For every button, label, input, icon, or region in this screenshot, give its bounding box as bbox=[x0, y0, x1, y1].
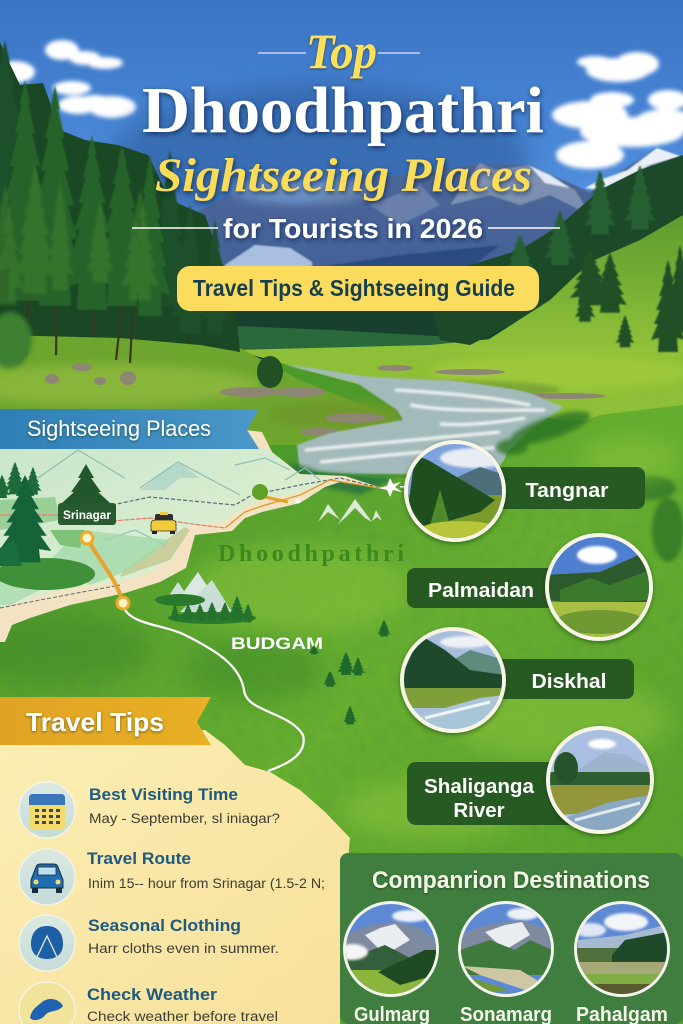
banner: Sightseeing Places bbox=[0, 409, 259, 449]
destination: Sonamarg bbox=[458, 901, 555, 1024]
right side shrubs bbox=[496, 405, 683, 562]
map place label: Budgam: BUDGAM bbox=[231, 634, 323, 653]
banner: Travel Tips: Travel Tips bbox=[26, 707, 164, 737]
place: Shaliganga River bbox=[407, 726, 655, 838]
place: Shaliganga River: River bbox=[453, 799, 505, 822]
place: Palmaidan: Palmaidan bbox=[428, 579, 534, 602]
map panel: illustrated Srinagar region bbox=[0, 430, 382, 642]
map route: orange road with stops bbox=[81, 532, 129, 609]
tip: Best Visiting Time: May - September, sl iniagar? bbox=[89, 811, 280, 826]
white mountain outline icon bbox=[318, 499, 382, 524]
destination: Gulmarg bbox=[336, 901, 440, 1024]
tip: Check Weather bbox=[19, 982, 278, 1024]
map route: white road to Budgam bbox=[125, 610, 304, 771]
subtitle pill: Travel Tips & Sightseeing Guide bbox=[193, 275, 515, 301]
place: Diskhal bbox=[400, 627, 634, 735]
sky background bbox=[0, 0, 683, 320]
map place label: Dhoodhpathri: Dhoodhpathri bbox=[218, 541, 404, 567]
distant mountains bbox=[170, 148, 683, 320]
grass shading bbox=[0, 438, 680, 840]
panel: travel tips parchment bbox=[0, 697, 350, 1024]
map icon: Srinagar tree and label bbox=[58, 464, 116, 525]
tip: Travel Route bbox=[19, 849, 325, 905]
left meadow ground bbox=[0, 325, 410, 445]
tip: Best Visiting Time bbox=[19, 782, 280, 838]
place: Diskhal: Diskhal bbox=[532, 670, 606, 693]
tip: Travel Route: Inim 15-- hour from Srinagar (1.5-2 N; bbox=[88, 876, 325, 891]
tip: Seasonal Clothing bbox=[19, 915, 279, 971]
darker sky behind title bbox=[110, 85, 530, 235]
left pine forest bbox=[0, 40, 283, 388]
place: Tangnar: Tangnar bbox=[526, 479, 609, 502]
map marker: green pin and orange link bbox=[252, 484, 300, 504]
river bbox=[285, 365, 563, 474]
banner: Travel Tips bbox=[0, 697, 211, 745]
tip: Check Weather: Check weather before travel bbox=[87, 1009, 278, 1024]
map icon: snow mountains with pines bbox=[155, 572, 256, 624]
title block bbox=[132, 23, 560, 244]
title block: for Tourists in 2026 bbox=[223, 213, 483, 244]
foreground meadow bbox=[0, 405, 683, 1024]
right forested hillside bbox=[430, 155, 683, 352]
tip: Seasonal Clothing: Seasonal Clothing bbox=[88, 916, 241, 935]
place: Tangnar bbox=[404, 440, 645, 545]
tip: Travel Route: Travel Route bbox=[87, 849, 191, 868]
map icon: Srinagar tree and label: Srinagar bbox=[63, 510, 112, 522]
map icon: pine trees on the left bbox=[0, 462, 51, 566]
place: Palmaidan bbox=[407, 533, 655, 642]
destination: Pahalgam bbox=[574, 901, 671, 1024]
clouds bbox=[0, 40, 683, 169]
panel: companion destinations bbox=[336, 853, 683, 1024]
tip: Best Visiting Time: Best Visiting Time bbox=[89, 785, 238, 804]
title block: Dhoodhpathri bbox=[142, 74, 544, 147]
title block: Sightseeing Places bbox=[155, 149, 532, 202]
heading: companion destinations: Companrion Destinations bbox=[372, 867, 650, 894]
title block: Top bbox=[306, 23, 377, 79]
dark valley forest band bbox=[225, 300, 525, 360]
tip: Check Weather: Check Weather bbox=[87, 985, 217, 1004]
subtitle pill bbox=[177, 266, 539, 311]
banner: Sightseeing Places: Sightseeing Places bbox=[27, 416, 211, 441]
map icon: taxi bbox=[151, 512, 176, 534]
valley meadow bbox=[235, 320, 683, 425]
map marker: white star leading to Tangnar bbox=[378, 478, 406, 497]
tip: Seasonal Clothing: Harr cloths even in summer. bbox=[88, 941, 279, 956]
rocks along river bank bbox=[45, 363, 605, 436]
small meadow pines bbox=[309, 620, 391, 724]
place: Shaliganga River: Shaliganga bbox=[424, 775, 535, 798]
